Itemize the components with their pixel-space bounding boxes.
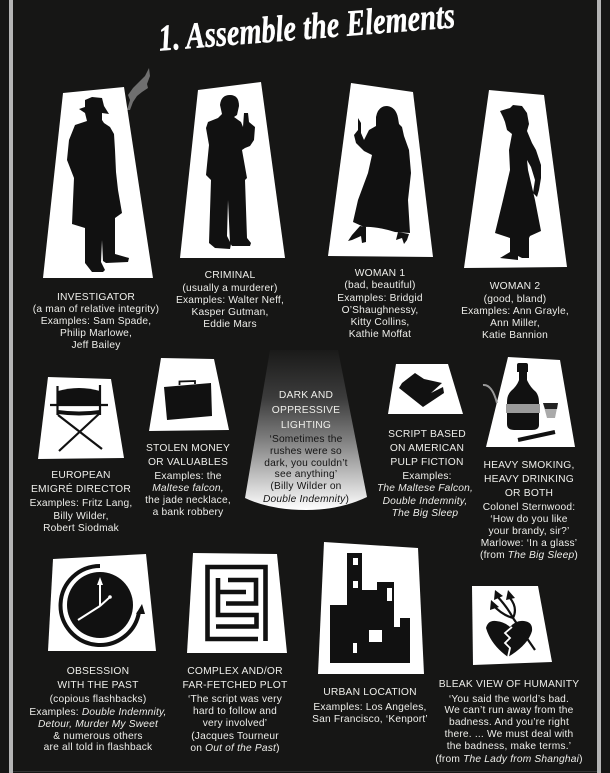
caption: San Francisco, ‘Kenport’ bbox=[312, 714, 428, 725]
caption: Maltese falcon, bbox=[152, 483, 224, 494]
caption: OR BOTH bbox=[505, 488, 553, 499]
light beam bbox=[48, 554, 156, 651]
panel: woman 2 bbox=[461, 90, 569, 341]
panel: criminal bbox=[176, 82, 285, 330]
icon: cigar bbox=[518, 432, 555, 440]
caption: O’Shaughnessy, bbox=[342, 305, 418, 316]
caption: EMIGRÉ DIRECTOR bbox=[31, 482, 131, 495]
caption: Examples: the bbox=[154, 471, 222, 482]
caption: Marlowe: ‘In a glass’ bbox=[481, 538, 577, 549]
caption: badness. And you’re right bbox=[449, 717, 569, 728]
caption: (good, bland) bbox=[484, 294, 546, 305]
quote: see anything’ bbox=[275, 469, 337, 480]
panel: script bbox=[377, 364, 473, 519]
caption: Double Indemnity, bbox=[383, 496, 467, 507]
caption: your brandy, sir?’ bbox=[489, 526, 569, 537]
silhouette: man with gun bbox=[206, 95, 255, 249]
caption: Philip Marlowe, bbox=[60, 328, 132, 339]
caption heading: OPPRESSIVE bbox=[272, 405, 340, 416]
light beam bbox=[318, 542, 424, 674]
light beam bbox=[43, 87, 153, 278]
caption: (copious flashbacks) bbox=[50, 694, 146, 705]
panel: investigator bbox=[33, 68, 159, 351]
caption: Billy Wilder, bbox=[53, 511, 109, 522]
smoke bbox=[127, 68, 150, 110]
panel: stolen money bbox=[145, 358, 231, 518]
panel: director bbox=[30, 377, 132, 534]
caption: Examples: bbox=[402, 471, 452, 482]
quote: rushes were so bbox=[270, 446, 342, 457]
caption: ON AMERICAN bbox=[390, 443, 464, 454]
caption: We can’t run away from the bbox=[444, 705, 574, 716]
caption: HEAVY DRINKING bbox=[484, 474, 574, 485]
caption: the badness, make terms.’ bbox=[447, 741, 571, 752]
caption: Eddie Mars bbox=[203, 319, 257, 330]
caption: WOMAN 2 bbox=[490, 281, 540, 292]
caption: on Out of the Past) bbox=[190, 743, 280, 754]
panel: smoking and drinking bbox=[480, 357, 578, 561]
caption: Ann Miller, bbox=[490, 318, 540, 329]
light beam bbox=[187, 553, 287, 653]
caption: Examples: Fritz Lang, bbox=[30, 498, 132, 509]
caption: OBSESSION bbox=[67, 666, 129, 677]
silhouette: man in trench coat bbox=[67, 97, 129, 272]
caption: COMPLEX AND/OR bbox=[187, 666, 283, 677]
caption: ‘The script was very bbox=[188, 694, 283, 705]
spotlight beam bbox=[245, 350, 367, 510]
caption: Robert Siodmak bbox=[43, 523, 120, 534]
icon: director's chair bbox=[50, 385, 108, 451]
caption: The Big Sleep bbox=[392, 508, 458, 519]
light beam bbox=[38, 377, 124, 459]
caption: (bad, beautiful) bbox=[344, 280, 416, 291]
caption: Colonel Sternwood: bbox=[483, 502, 575, 513]
caption: Examples: Bridgid bbox=[337, 293, 423, 304]
caption: Kitty Collins, bbox=[351, 317, 409, 328]
silhouette: woman in hat bbox=[495, 105, 541, 260]
caption: (usually a murderer) bbox=[182, 283, 278, 294]
panel: bleak view of humanity bbox=[435, 586, 583, 765]
icon: broken heart and trident bbox=[486, 590, 535, 657]
light beam bbox=[180, 82, 285, 258]
caption: URBAN LOCATION bbox=[323, 687, 417, 698]
icon: bottle bbox=[507, 363, 539, 430]
light beam bbox=[486, 357, 575, 447]
caption: there. ... We must deal with bbox=[445, 729, 573, 740]
caption: Detour, Murder My Sweet bbox=[38, 719, 159, 730]
light beam bbox=[472, 586, 552, 665]
caption: OR VALUABLES bbox=[148, 457, 228, 468]
caption: PULP FICTION bbox=[390, 457, 464, 468]
caption: are all told in flashback bbox=[44, 742, 153, 753]
caption: hard to follow and bbox=[193, 706, 277, 717]
panel: obsession with the past bbox=[29, 554, 167, 753]
caption: Katie Bannion bbox=[482, 330, 548, 341]
caption: FAR-FETCHED PLOT bbox=[182, 680, 288, 691]
caption: The Maltese Falcon, bbox=[377, 483, 473, 494]
caption: Kathie Moffat bbox=[349, 329, 411, 340]
panel: complex plot bbox=[182, 553, 288, 754]
icon: city skyline bbox=[330, 553, 410, 663]
caption: SCRIPT BASED bbox=[388, 429, 466, 440]
caption: Examples: Walter Neff, bbox=[176, 295, 284, 306]
caption heading: LIGHTING bbox=[281, 420, 331, 431]
caption: Jeff Bailey bbox=[71, 340, 121, 351]
caption: a bank robbery bbox=[153, 507, 224, 518]
shoes bbox=[348, 226, 409, 244]
quote: Double Indemnity) bbox=[263, 494, 349, 505]
silhouette: woman with gun bbox=[348, 106, 411, 244]
bottle label bbox=[506, 404, 540, 413]
caption: & numerous others bbox=[53, 731, 143, 742]
icon: script pages bbox=[399, 373, 444, 407]
caption: the jade necklace, bbox=[145, 495, 231, 506]
light beam bbox=[464, 90, 567, 268]
caption: very involved’ bbox=[203, 718, 267, 729]
caption: Kasper Gutman, bbox=[192, 307, 268, 318]
caption: INVESTIGATOR bbox=[57, 292, 135, 303]
caption heading: DARK AND bbox=[279, 390, 333, 401]
icon: smoke bbox=[483, 385, 497, 403]
caption: WOMAN 1 bbox=[355, 268, 405, 279]
icon: glass bbox=[543, 403, 558, 418]
icon: maze bbox=[208, 567, 266, 641]
caption: BLEAK VIEW OF HUMANITY bbox=[439, 679, 579, 690]
panel: dark and oppressive lighting bbox=[245, 350, 367, 510]
icon: briefcase bbox=[164, 381, 212, 420]
caption: ‘How do you like bbox=[490, 514, 568, 525]
caption: (a man of relative integrity) bbox=[33, 304, 159, 315]
caption: HEAVY SMOKING, bbox=[483, 460, 575, 471]
light beam bbox=[149, 358, 229, 431]
caption: STOLEN MONEY bbox=[146, 443, 230, 454]
caption: (from The Big Sleep) bbox=[480, 550, 578, 561]
caption: CRIMINAL bbox=[205, 270, 255, 281]
caption: Examples: Ann Grayle, bbox=[461, 306, 569, 317]
quote: dark, you couldn’t bbox=[264, 458, 348, 469]
light beam bbox=[328, 83, 433, 257]
caption: (Jacques Tourneur bbox=[191, 731, 279, 742]
caption: WITH THE PAST bbox=[57, 680, 139, 691]
light beam bbox=[388, 364, 463, 414]
quote: ‘Sometimes the bbox=[269, 434, 343, 445]
panel: urban location bbox=[312, 542, 428, 725]
caption: (from The Lady from Shanghai) bbox=[435, 754, 583, 765]
caption: Examples: Sam Spade, bbox=[41, 316, 151, 327]
caption: ‘You said the world’s bad. bbox=[449, 694, 569, 705]
icon: clock bbox=[61, 566, 145, 645]
caption: EUROPEAN bbox=[51, 470, 111, 481]
quote: (Billy Wilder on bbox=[270, 481, 342, 492]
caption: Examples: Double Indemnity, bbox=[29, 707, 167, 718]
panel: woman 1 bbox=[328, 83, 433, 340]
caption: Examples: Los Angeles, bbox=[313, 702, 427, 713]
